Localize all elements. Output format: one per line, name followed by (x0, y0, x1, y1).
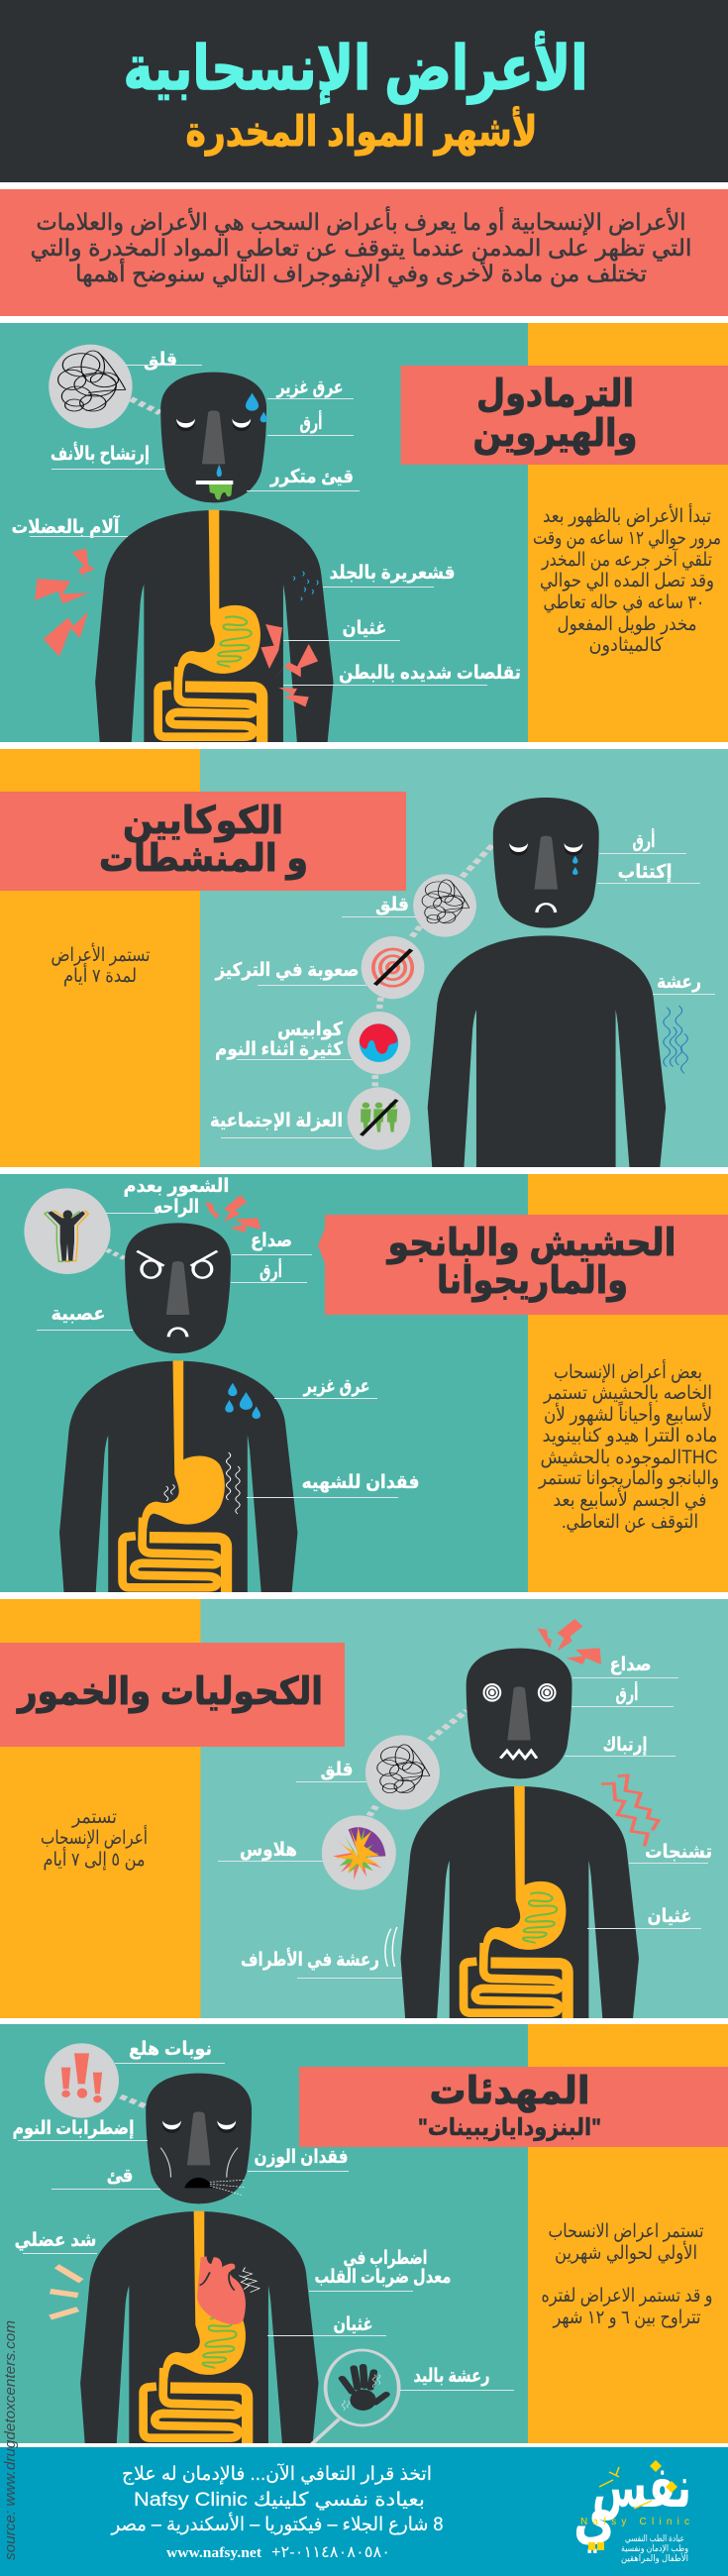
title block: والهيروين (473, 413, 638, 456)
title block (401, 366, 728, 465)
label: irritability: عصبية (52, 1304, 105, 1325)
label: difficulty concentrating: صعوبة في التركيز (215, 960, 359, 981)
footer call to action: +٢-٠١١٤٨٠٨٠٥٨٠ (271, 2544, 390, 2561)
icon: hallucination burst (333, 1827, 385, 1879)
label: weight loss: فقدان الوزن (254, 2147, 349, 2168)
label: insomnia (599, 828, 686, 854)
footer call to action (111, 2463, 443, 2561)
side text: تتراوح بين ٦ و ١٢ شهر (553, 2308, 701, 2328)
side text: لمدة ٧ أيام (63, 963, 137, 987)
label: headache (572, 1655, 678, 1678)
label: heart rate disturbance: معدل ضربات القلب (315, 2267, 452, 2288)
icon: trembling hand (312, 2350, 399, 2444)
label: vomiting: قئ (107, 2166, 133, 2187)
panel: alcohol (0, 1599, 728, 2022)
footer panel (0, 2447, 728, 2576)
figure: hashish body (24, 1188, 297, 1597)
side text: ٣٠ ساعه في حاله تعاطي (543, 592, 705, 613)
logo: الأطفال والمراهقين (621, 2552, 688, 2563)
label: anxiety: قلق (375, 895, 409, 915)
label: depression (597, 862, 700, 884)
label: headache: صداع (610, 1655, 652, 1675)
label: goosebumps: قشعريرة بالجلد (329, 563, 456, 584)
label: irritability (37, 1304, 133, 1330)
label: headache (232, 1231, 312, 1254)
label: anxiety: قلق (144, 350, 177, 371)
side text: ماده التترا هيدو كنابينويد (543, 1426, 717, 1447)
title block: و المنشطات (99, 838, 308, 881)
label: tremor: رعشة (657, 972, 701, 993)
label: heart rate disturbance: اضطراب في (343, 2248, 428, 2269)
side text (533, 503, 721, 656)
label: runny nose: إرتشاح بالأنف (51, 442, 150, 465)
panel: tramadol and heroin (0, 323, 728, 746)
figure: sedatives body (45, 2043, 399, 2447)
intro panel: التي تظهر على المدمن عندما يتوقف عن تعاطي المواد المخدرة والتي (30, 235, 691, 262)
label: nausea: غثيان (333, 2314, 372, 2335)
label: hallucinations: هلاوس (240, 1840, 297, 1861)
title block (299, 2067, 728, 2147)
label: nausea (267, 2314, 386, 2336)
side text (541, 2221, 713, 2328)
label: insomnia: أرق (299, 410, 323, 434)
label: anxiety: قلق (321, 1760, 353, 1780)
figure: cocaine body (348, 798, 687, 1169)
title block: المهدئات (430, 2071, 590, 2112)
side text: التوقف عن التعاطي. (562, 1512, 698, 1533)
label: insomnia: أرق (632, 828, 656, 852)
label: heart rate disturbance (309, 2248, 452, 2291)
logo: Nafsy Clinic (580, 2517, 689, 2527)
label: insomnia (572, 1681, 674, 1706)
side text: كالميثادون (588, 635, 664, 656)
label: panic attacks: نوبات هلع (129, 2039, 212, 2060)
label: heavy sweating: عرق غزير (303, 1376, 370, 1397)
label: nightmares: كثيرة اثناء النوم (215, 1039, 344, 1060)
label: insomnia (267, 410, 354, 436)
title block: "البنزودايازيبينات" (418, 2114, 601, 2141)
title block (0, 792, 406, 891)
bubble: nightmares (348, 1012, 410, 1074)
label: nausea (283, 618, 400, 640)
panel: hashish, bango and marijuana (0, 1174, 728, 1597)
logo (573, 2455, 691, 2563)
side text: من ٥ إلى ٧ أيام (44, 1847, 145, 1872)
label: anxiety (296, 1760, 366, 1781)
label: abdominal cramps: تقلصات شديده بالبطن (339, 663, 521, 684)
label: muscle tension: شد عضلي (14, 2230, 97, 2251)
side text: مخدر طويل المفعول (557, 614, 697, 635)
label: discomfort (106, 1176, 230, 1218)
bubble: concentration target (362, 936, 424, 999)
side text: بعض أعراض الإنسحاب (554, 1359, 702, 1383)
bubble: social isolation (348, 1087, 410, 1150)
side text: تستمر الأعراض (52, 943, 151, 966)
intro panel: الأعراض الإنسحابية أو ما يعرف بأعراض السحب هي الأعراض والعلامات (36, 206, 685, 236)
logo: عيادة الطب النفسي (625, 2533, 684, 2543)
label: nightmares (215, 1020, 353, 1060)
title block: الكحوليات والخمور (16, 1671, 323, 1714)
side text: THCالموجوده بالحشيش (541, 1448, 717, 1468)
label: heavy sweating (274, 1376, 377, 1399)
main title: الأعراض الإنسحابية (123, 31, 588, 105)
side text: في الجسم لأسابيع بعد (553, 1488, 707, 1511)
label: insomnia (231, 1258, 307, 1282)
intro panel: تختلف من مادة لأخرى وفي الإنفوجراف التالي سنوضح أهمها (75, 259, 647, 287)
footer call to action: www.nafsy.net (166, 2545, 261, 2561)
label: insomnia: أرق (616, 1681, 638, 1705)
label: vomiting (52, 2166, 160, 2190)
label: hand tremor: رعشة باليد (414, 2366, 489, 2387)
side text (52, 943, 151, 987)
label: limb tremor: رعشة في الأطراف (241, 1948, 379, 1971)
title block (0, 1643, 345, 1747)
intro panel (0, 189, 728, 316)
label: confusion: إرتباك (602, 1735, 648, 1756)
label: heavy sweating: عرق غزير (276, 377, 343, 398)
label: nightmares: كوابيس (277, 1020, 344, 1040)
header band (0, 0, 728, 182)
label: vomiting (247, 467, 360, 491)
subtitle: لأشهر المواد المخدرة (186, 106, 537, 157)
panel: cocaine and stimulants (0, 749, 728, 1169)
label: headache: صداع (251, 1231, 292, 1251)
icon: heart (197, 2256, 260, 2324)
label: nausea: غثيان (343, 618, 386, 639)
label: vomiting: قيئ متكرر (269, 467, 354, 487)
footer call to action: 8 شارع الجلاء – فيكتوريا – الأسكندرية – مصر (111, 2513, 443, 2535)
side text: الأولي لحوالي شهرين (555, 2241, 697, 2264)
figure: tramadol body (35, 345, 334, 746)
side text (538, 1359, 719, 1533)
title block (318, 1215, 728, 1315)
label: weight loss (248, 2147, 349, 2172)
label: confusion (565, 1735, 676, 1756)
side text (41, 1807, 148, 1872)
bubble: anxiety (365, 1735, 440, 1810)
label: appetite loss: فقدان للشهيه (301, 1472, 420, 1493)
title block: الكوكايين (123, 801, 283, 842)
label: discomfort: الراحه (154, 1197, 199, 1218)
label: social isolation: العزلة الإجتماعية (210, 1111, 343, 1131)
logo: وطب الإدمان ونفسية (621, 2543, 688, 2554)
title block: الحشيش والبانجو (386, 1223, 676, 1265)
side text: أعراض الإنسحاب (41, 1825, 148, 1849)
label: nausea (587, 1906, 701, 1928)
footer call to action: بعيادة نفسي كلينيك Nafsy Clinic (134, 2490, 425, 2511)
label: hallucinations (218, 1840, 323, 1861)
label: insomnia: أرق (260, 1258, 282, 1282)
label: seizures: تشنجات (645, 1842, 712, 1863)
side text: الخاصه بالحشيش تستمر (543, 1383, 712, 1404)
icon: uneasy figure (45, 1210, 88, 1261)
label: sleep disorders: إضطرابات النوم (12, 2118, 135, 2139)
label: nausea: غثيان (648, 1906, 691, 1927)
label: muscle pain: آلام بالعضلات (12, 514, 120, 538)
label: anxiety (342, 895, 416, 917)
footer call to action: اتخذ قرار التعافي الآن... فالإدمان له علاج (122, 2463, 432, 2485)
title block: الترمادول (476, 374, 634, 416)
logo: ي (573, 2484, 615, 2553)
side text: تستمر (71, 1807, 117, 1828)
label: depression: إكتئاب (618, 862, 672, 883)
figure: alcohol body (322, 1619, 659, 2022)
label: discomfort: الشعور بعدم (123, 1176, 230, 1197)
bubble: anxiety (413, 874, 476, 937)
label: anxiety (126, 350, 202, 371)
title block: والماريجوانا (437, 1260, 628, 1303)
source credit: source: www.drugdetoxcenters.com (2, 2320, 19, 2560)
panel: sedatives (0, 2024, 728, 2447)
